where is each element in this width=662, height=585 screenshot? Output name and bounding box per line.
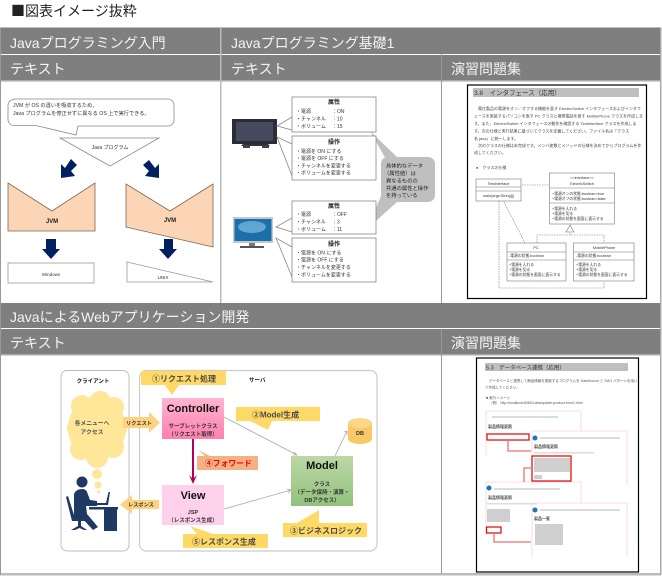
body text: （例） http://localhost:8080/Labs/update-product-form1.html xyxy=(489,400,583,405)
UML labels: +電源を入れる xyxy=(552,206,577,211)
screenshot contents: 製品一覧 xyxy=(534,515,550,521)
section heading bar: 5.3 データベース連携（応用） xyxy=(486,364,565,372)
callout: concrete data: 具体的なデータ xyxy=(386,162,423,170)
box: attributes 1 xyxy=(292,97,376,132)
callout: concrete data: （属性値）は xyxy=(384,169,416,177)
callout 1: request handling xyxy=(141,371,226,395)
title: ■図表イメージ抜粋 xyxy=(11,1,137,21)
UML labels: +電源オフの状態:boolean=false xyxy=(552,196,606,201)
DB cylinder: DB xyxy=(356,431,364,437)
client box xyxy=(61,370,129,551)
box: operations 2: ・電源を ON にする xyxy=(296,250,341,256)
JVM right xyxy=(126,184,213,247)
callout: concrete data: 異なるものの xyxy=(386,178,418,184)
UML labels: <<interface>> xyxy=(570,176,594,180)
icon: person at desk xyxy=(66,476,118,531)
Model box: クラス xyxy=(314,480,331,488)
Controller box: サーブレットクラス xyxy=(168,422,218,430)
box: operations 2: 操作 xyxy=(328,240,340,248)
UML labels: MobilePhone xyxy=(593,246,615,250)
Model box: DBアクセス） xyxy=(304,496,340,504)
box: attributes 1: 属性 xyxy=(328,98,340,106)
body text: 次のクラスの仕様は未完成です。メンバ変数とメソッドの仕様を決めてからプログラムを作 xyxy=(474,142,641,148)
box: attributes 2: ：3 xyxy=(332,220,340,226)
arrow: response xyxy=(120,495,159,514)
connector lines xyxy=(276,117,292,277)
arrow: request: リクエスト xyxy=(126,419,152,427)
body text: て作成してください。 xyxy=(485,384,520,390)
box: operations 2: ・チャンネルを変更する xyxy=(296,264,351,271)
UNIX shape: UNIX xyxy=(158,275,168,280)
callout 3: business logic xyxy=(283,510,367,537)
UML labels: TestInterface xyxy=(488,182,509,186)
body text: ェースを実装するパソコンを表す PC クラスと携帯電話を表す MobilePhone クラスを作成しま xyxy=(474,112,643,118)
section heading bar xyxy=(485,363,628,372)
Windows box: Windows xyxy=(42,272,61,277)
body text: す。次の仕様と実行結果に基づいてクラスを定義してください。ファイル名は「クラス xyxy=(474,128,629,134)
UML labels: +電源の状態を画面に表示する xyxy=(576,272,628,277)
body text: 名.java」に統一します。 xyxy=(474,135,518,141)
header: text, column 1: テキスト xyxy=(10,61,66,77)
callout 2: model generation: ②Model生成 xyxy=(252,410,299,420)
Model box: Model xyxy=(306,460,338,472)
arrow: down to Windows xyxy=(42,239,60,259)
box: attributes 2: 属性 xyxy=(328,202,340,210)
UML labels: +電源の状態を画面に表示する xyxy=(552,216,604,221)
UML labels: -電源の状態:boolean xyxy=(509,253,544,258)
box: attributes 2: ：OFF xyxy=(332,212,347,218)
UML labels: +電源の状態を画面に表示する xyxy=(509,272,561,277)
body text xyxy=(474,105,643,170)
JVM left: JVM xyxy=(46,219,58,225)
box: attributes 2: ・ボリューム xyxy=(296,226,326,233)
panel: database exercise page xyxy=(476,358,638,572)
Controller box xyxy=(162,398,224,439)
body text: 成してください。 xyxy=(474,149,506,155)
UML labels xyxy=(483,176,628,277)
arrow: to right JVM xyxy=(143,160,159,178)
panel: TV objects diagram xyxy=(232,97,435,282)
thought cloud: 各メニューへ xyxy=(75,419,110,427)
box: attributes 1: ：ON xyxy=(332,109,345,115)
box: operations 1: ・ボリュームを変更する xyxy=(296,170,351,176)
callout: concrete data: 共通の属性と操作 xyxy=(386,184,429,192)
arrow: response: レスポンス xyxy=(128,500,154,508)
box: attributes 1: ：10 xyxy=(332,116,343,122)
panel: MVC diagram xyxy=(61,370,377,551)
body text: 電化製品の電源をオン／オフする機能を表す ElectricSwitch インタフェースおよびインタフ xyxy=(474,105,641,111)
box: operations 1: ・電源を OFF にする xyxy=(296,155,344,162)
header: Java programming intro: Javaプログラミング入門 xyxy=(10,35,166,51)
arrow: forward xyxy=(189,439,197,484)
UML labels: +電源を切る xyxy=(552,211,573,216)
callout: JVM note: JVM が OS の違いを吸収するため、 xyxy=(13,101,97,109)
arrow: down to UNIX xyxy=(159,239,177,259)
UML labels: +電源オンの状態:boolean=true xyxy=(552,191,604,196)
screenshot contents: 製品情報更新 xyxy=(488,494,512,500)
Java program triangle: Java プログラム xyxy=(92,144,128,151)
box: attributes 2: ・チャンネル xyxy=(296,220,326,226)
UML labels: main(args:String[]) xyxy=(483,194,515,198)
callout: JVM note xyxy=(8,99,174,135)
thought cloud: アクセス xyxy=(81,428,104,436)
box: attributes 1: ：15 xyxy=(332,124,343,130)
box: attributes 1: ・ボリューム xyxy=(296,123,326,130)
UML labels: +電源を切る xyxy=(509,267,530,272)
callout 1: request handling: ①リクエスト処理 xyxy=(152,374,216,384)
callout: concrete data: を持っている xyxy=(386,191,418,199)
View box: JSP xyxy=(188,510,199,516)
panel: interface exercise page xyxy=(468,85,646,298)
box: attributes 2 xyxy=(292,201,376,234)
UML labels: ElectricSwitch xyxy=(570,182,594,186)
screenshot contents xyxy=(486,416,620,545)
box: attributes 1: ・電源 xyxy=(296,108,311,115)
JVM right: JVM xyxy=(164,218,176,224)
UML labels: +電源を切る xyxy=(576,267,597,272)
thought cloud xyxy=(67,391,127,494)
box: operations 1: ・チャンネルを変更する xyxy=(296,162,351,170)
icon: blue TV xyxy=(233,217,273,248)
server box xyxy=(140,370,377,551)
box: operations 1: ・電源を ON にする xyxy=(296,148,341,155)
UML labels: +電源を入れる xyxy=(509,262,534,267)
icon: dark TV xyxy=(232,119,277,148)
Model box: （データ保持・演算・ xyxy=(294,488,350,496)
body text: ■ 実行イメージ xyxy=(486,395,511,400)
Windows box xyxy=(8,263,94,283)
callout 4: forward xyxy=(197,450,258,470)
screenshot frames xyxy=(486,411,627,557)
box: operations 2: ・電源を OFF にする xyxy=(296,256,344,264)
Controller box: Controller xyxy=(167,403,220,415)
section heading bar: 3.8 インタフェース（応用） xyxy=(474,88,561,97)
callout: concrete data xyxy=(368,131,435,228)
connector arrows xyxy=(224,417,347,509)
red highlights and arrows xyxy=(486,434,571,542)
UML labels: +電源を入れる xyxy=(576,262,601,267)
DB cylinder xyxy=(348,418,372,444)
arrow: to left JVM xyxy=(61,159,77,178)
box: operations 2 xyxy=(292,238,376,282)
View box: View xyxy=(181,490,206,502)
screenshot contents: 製品情報更新 xyxy=(488,423,512,429)
UML labels: -電源の状態:boolean xyxy=(576,253,611,258)
panel: JVM diagram xyxy=(8,99,213,283)
screenshot contents: 製品情報更新 xyxy=(534,443,558,449)
callout 2: model generation xyxy=(236,407,320,430)
body text: データベースと連携して商品情報を更新するプログラムを DataSource と DAO パターンを用い xyxy=(489,378,638,383)
JVM left xyxy=(8,183,95,231)
header: Java web application development: JavaによるWebアプリケーション開発 xyxy=(10,309,249,325)
box: attributes 2: ・電源 xyxy=(296,211,311,218)
box: operations 1 xyxy=(292,136,376,180)
label: client: クライアント xyxy=(77,377,109,385)
body text: ● クラスの仕様 xyxy=(476,164,506,170)
callout 4: forward: ④フォワード xyxy=(205,459,252,468)
Model box xyxy=(291,456,353,506)
box: operations 2: ・ボリュームを変更する xyxy=(296,272,351,278)
UNIX shape xyxy=(127,262,213,282)
callout: JVM note: Java プログラムを修正せずに異なる OS 上で実行できる。 xyxy=(13,109,150,117)
View box xyxy=(162,485,224,525)
box: attributes 1: ・チャンネル xyxy=(296,116,326,122)
header: exercises, column 3: 演習問題集 xyxy=(451,61,521,77)
header: text, column 2: テキスト xyxy=(231,61,287,77)
section heading bar xyxy=(473,88,639,97)
View box: （レスポンス生成） xyxy=(168,516,218,524)
header: exercises, row 2: 演習問題集 xyxy=(451,335,521,351)
Java program triangle xyxy=(60,138,159,166)
box: attributes 2: ：11 xyxy=(332,227,342,233)
header: Java programming basics 1: Javaプログラミング基礎1 xyxy=(231,35,395,51)
Controller box: （リクエスト取得） xyxy=(168,430,218,438)
callout 5: response generation xyxy=(183,526,268,548)
body text xyxy=(485,378,638,405)
box: operations 1: 操作 xyxy=(328,138,340,146)
UML class diagram xyxy=(476,173,634,288)
header: text, row 2: テキスト xyxy=(10,335,66,351)
callout 3: business logic: ③ビジネスロジック xyxy=(290,526,362,536)
UML labels: PC xyxy=(533,246,539,250)
callout 5: response generation: ⑤レスポンス生成 xyxy=(192,536,256,546)
arrow: request xyxy=(123,412,160,433)
label: server: サーバ xyxy=(249,377,266,384)
body text: す。また、ElectricSwitch インタフェースの動作を確認する TestInterface クラスを作成しま xyxy=(474,120,636,126)
